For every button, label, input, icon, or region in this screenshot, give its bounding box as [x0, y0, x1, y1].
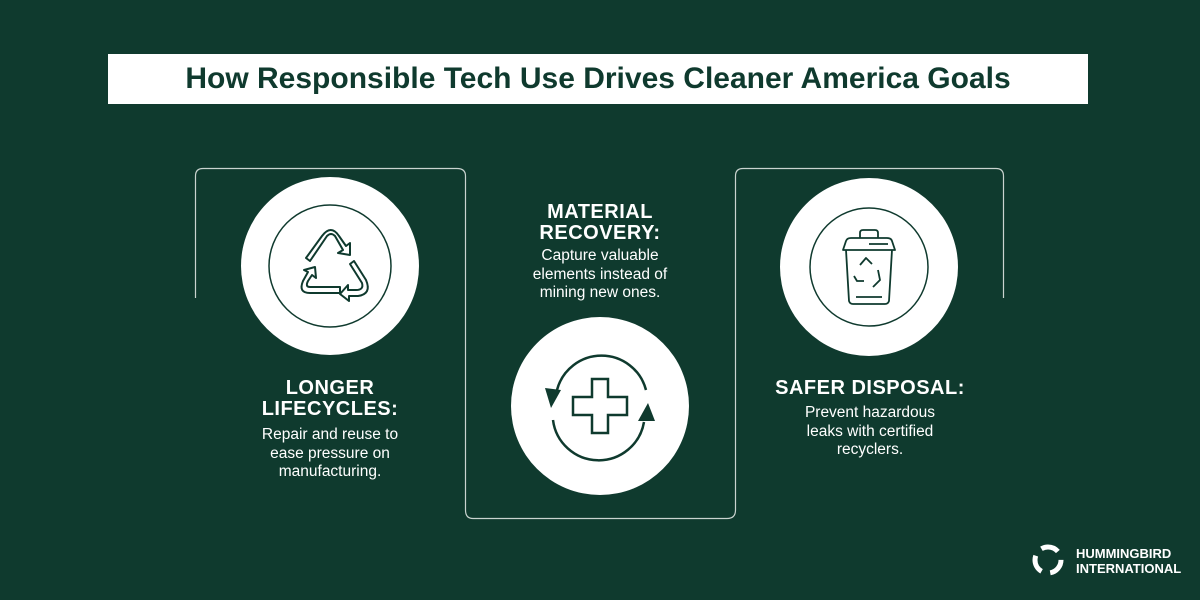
icon: recycling bin — [780, 178, 958, 356]
title — [108, 54, 1088, 104]
logo text: INTERNATIONAL — [1076, 561, 1181, 576]
icon: circular arrows with plus — [511, 317, 689, 495]
logo text: HUMMINGBIRD — [1076, 546, 1171, 561]
text: material recovery: MATERIAL — [547, 201, 653, 223]
icon: recycle — [241, 177, 419, 355]
text: safer disposal: Prevent hazardous leaks with certified recyclers. — [805, 404, 935, 458]
text: safer disposal: SAFER DISPOSAL: — [775, 377, 965, 399]
text: longer lifecycles: LIFECYCLES: — [262, 398, 398, 420]
text: material recovery: RECOVERY: — [539, 222, 661, 244]
text: longer lifecycles — [262, 377, 398, 480]
logo text — [1076, 546, 1181, 576]
title: How Responsible Tech Use Drives Cleaner America Goals — [185, 62, 1011, 95]
text: material recovery — [533, 201, 668, 301]
text: safer disposal — [775, 377, 965, 458]
text: longer lifecycles: LONGER — [286, 377, 374, 399]
logo icon — [1035, 547, 1061, 573]
text: longer lifecycles: Repair and reuse to ease pressure on manufacturing. — [262, 426, 398, 480]
text: material recovery: Capture valuable elements instead of mining new ones. — [533, 247, 667, 301]
